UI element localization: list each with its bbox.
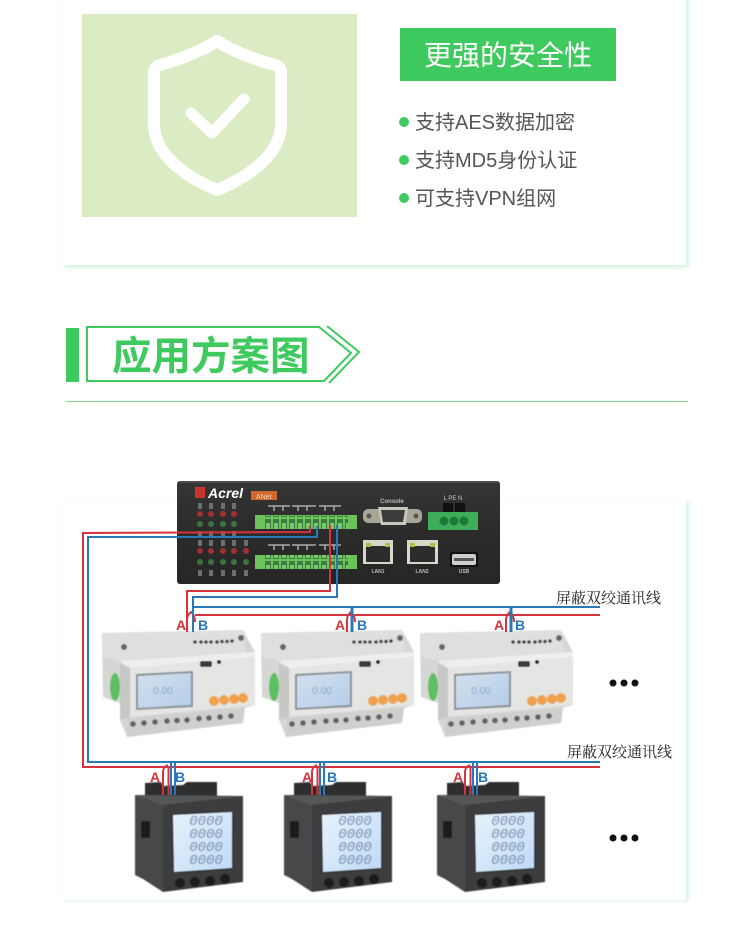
wire labels: A and B: [150, 617, 525, 785]
heading: application diagram: [66, 326, 359, 383]
wire labels: A and B: B: [327, 769, 337, 785]
ellipsis: more DIN meters: [610, 680, 638, 686]
icon panel: shield: [82, 14, 357, 217]
heading: stronger security: [400, 28, 616, 81]
meters row: DIN rail: [102, 630, 573, 737]
panel: security card: [63, 0, 689, 268]
wire labels: A and B: A: [150, 769, 160, 785]
console port: Console: [380, 499, 404, 505]
label: shielded twisted pair, upper: 屏蔽双绞通讯线: [556, 589, 661, 607]
wire labels: A and B: A: [494, 617, 504, 633]
LAN2 port: [407, 540, 438, 575]
wire labels: A and B: A: [302, 769, 312, 785]
power terminal: [428, 496, 478, 530]
wire labels: A and B: B: [478, 769, 488, 785]
wiring: blue line B: [88, 525, 600, 795]
terminal block: lower: [255, 545, 357, 569]
wire labels: A and B: B: [515, 617, 525, 633]
brand logo: Acrel: [207, 485, 244, 501]
wire labels: A and B: A: [335, 617, 345, 633]
meters row: panel: [135, 782, 545, 892]
wire labels: A and B: A: [453, 769, 463, 785]
feature list: [399, 111, 577, 210]
USB port: USB: [459, 569, 470, 575]
feature list: 可支持VPN组网: [415, 187, 556, 210]
wire labels: A and B: B: [175, 769, 185, 785]
feature list: 支持AES数据加密: [415, 111, 575, 134]
terminal block: upper: [255, 506, 357, 529]
status LEDs: [197, 503, 249, 576]
ellipsis: more panel meters: [610, 834, 638, 842]
LAN2 port: LAN2: [415, 569, 429, 575]
brand logo: ANet: [256, 494, 272, 501]
wiring: red line A: [83, 525, 600, 795]
power terminal: L PE N: [444, 496, 462, 502]
label: shielded twisted pair, lower: 屏蔽双绞通讯线: [567, 743, 672, 761]
heading: stronger security: 更强的安全性: [424, 40, 592, 71]
console port: [363, 499, 422, 525]
wire labels: A and B: B: [198, 617, 208, 633]
device: ANet gateway: [177, 481, 500, 584]
LAN1 port: LAN1: [371, 569, 385, 575]
brand logo: [195, 485, 277, 501]
USB port: [450, 552, 478, 575]
wire labels: A and B: A: [176, 617, 186, 633]
LAN1 port: [363, 540, 393, 575]
wire labels: A and B: B: [357, 617, 367, 633]
feature list: 支持MD5身份认证: [415, 149, 577, 172]
heading: application diagram: 应用方案图: [112, 335, 310, 379]
panel: application diagram card: [63, 481, 689, 901]
